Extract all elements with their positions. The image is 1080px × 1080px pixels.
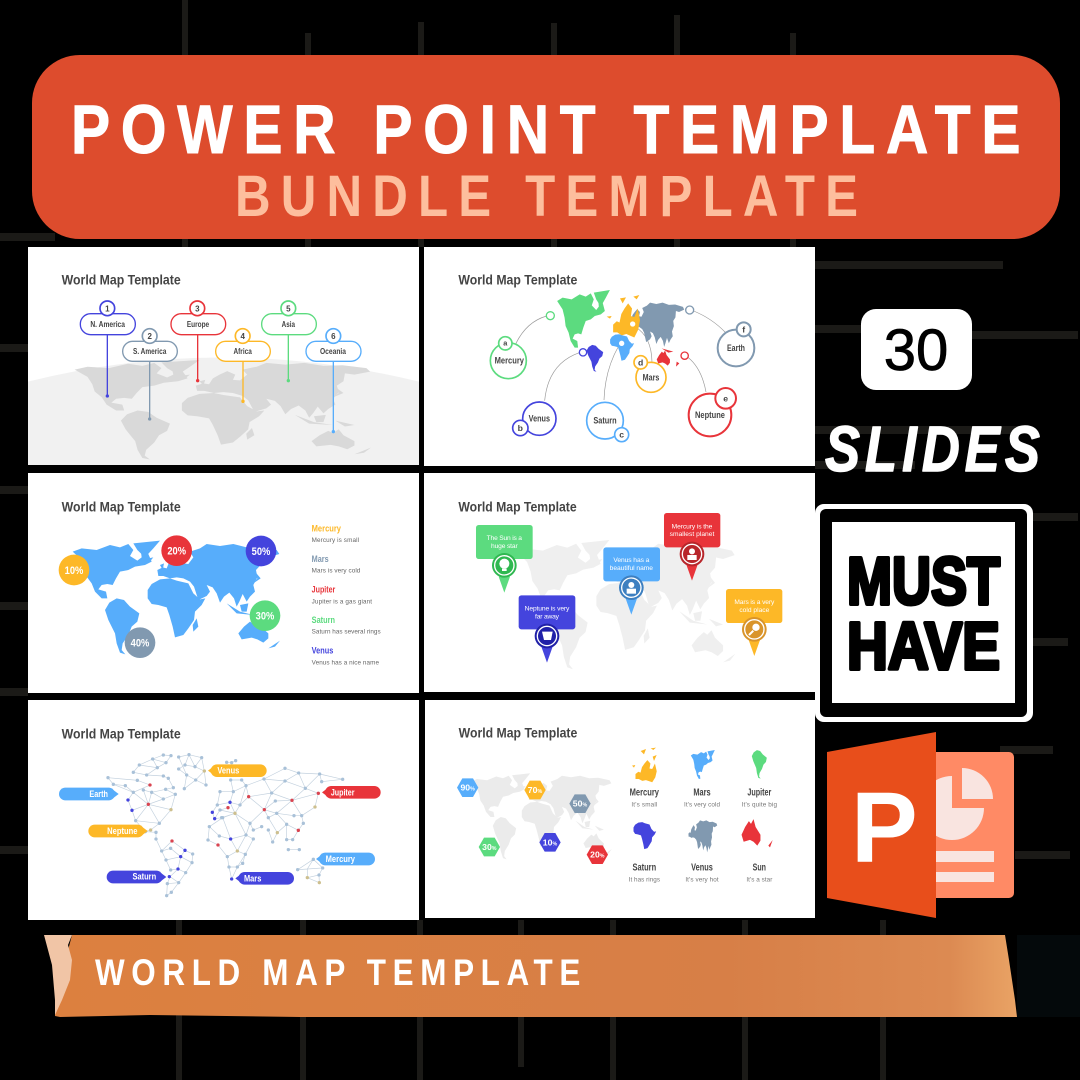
item: Jupiter [742, 750, 777, 809]
item: Saturn [629, 822, 660, 883]
slide 5: network map [28, 700, 419, 920]
item: Jupiter: It's quite big [742, 802, 777, 809]
callout: Africa [216, 329, 270, 403]
item: Venus: It's very hot [685, 876, 719, 883]
planet: Venus: Venus [529, 414, 550, 424]
callout: N. America: N. America [90, 319, 125, 329]
pin: Venus: beautiful name [610, 565, 653, 572]
label: Earth [59, 788, 119, 800]
pin: Mars: cold place [739, 607, 770, 614]
connectors [516, 311, 725, 401]
legend: Mars is very cold [312, 568, 361, 575]
blue map [73, 541, 280, 654]
item: Mars: Mars [693, 788, 711, 799]
item: Saturn: It has rings [629, 876, 660, 883]
item: Mars [684, 750, 720, 809]
badge: MUST HAVE: HAVE [847, 609, 1000, 684]
icon: PowerPoint: P [851, 772, 918, 884]
subtitle: BUNDLE TEMPLATE [235, 164, 858, 229]
bottom ribbon [44, 935, 1017, 1017]
callout: Asia: 5 [286, 304, 291, 313]
legend: Jupiter [312, 584, 336, 594]
hexagon markers: 30% [482, 842, 497, 852]
callout: Oceania [306, 329, 361, 433]
legend: Saturn [312, 615, 335, 625]
pin: Neptune [519, 595, 575, 663]
legend: Mercury [312, 523, 342, 533]
planet: Venus [513, 402, 556, 436]
item: Saturn: Saturn [632, 862, 656, 873]
pin: Neptune: far away [535, 614, 560, 621]
hexagon markers [457, 778, 608, 864]
percentage markers: 30% [256, 611, 275, 623]
slide title: World Map Template [62, 726, 181, 742]
planet: Saturn: Saturn [593, 416, 617, 426]
label: Venus: Venus [217, 766, 239, 776]
planet: Earth: f [742, 324, 745, 334]
hexagon markers: 10% [543, 837, 557, 847]
planet: Mars [634, 356, 666, 392]
anchor dots [546, 306, 694, 359]
item: Venus: Venus [691, 862, 713, 873]
main title: POWER POINT TEMPLATE [71, 91, 1020, 168]
pin: Mars [726, 589, 782, 656]
gray map [75, 360, 371, 459]
label: Mercury: Mercury [326, 854, 356, 864]
planet: Earth [718, 322, 754, 366]
planet: Saturn: c [619, 429, 624, 439]
item: Mercury: Mercury [630, 788, 659, 799]
pin: Mercury: smallest planet [670, 531, 714, 538]
legend: Venus has a nice name [312, 659, 379, 666]
pin: Venus [603, 547, 660, 615]
callout: Europe [171, 301, 226, 382]
legend [312, 523, 381, 666]
planet: Neptune [689, 388, 736, 436]
label: Saturn [107, 871, 166, 883]
slide title: World Map Template [62, 271, 181, 287]
badge: 30: 30 [884, 318, 948, 383]
hexagon markers: 70% [528, 785, 542, 795]
label: Jupiter [322, 786, 381, 799]
percentage markers: 40% [131, 638, 150, 650]
item: Mars: It's very cold [684, 802, 720, 809]
slide 6: hexagons and continents [425, 700, 815, 918]
pin: Sun: The Sun is a [487, 535, 522, 542]
pin: Mercury [664, 513, 720, 581]
item: Mercury [630, 748, 659, 809]
callout: Europe: 3 [195, 304, 200, 313]
label: Saturn: Saturn [132, 872, 156, 882]
percentage markers [59, 535, 280, 658]
percentage markers: 10% [65, 565, 84, 577]
callout: S. America: 2 [147, 332, 152, 341]
callout: Europe: Europe [187, 319, 209, 329]
globe [28, 357, 419, 465]
legend: Saturn has several rings [312, 629, 381, 636]
item: Jupiter: Jupiter [747, 788, 772, 799]
slide title: World Map Template [62, 499, 181, 515]
badge: MUST HAVE: MUST [847, 544, 1000, 619]
label: Neptune: Neptune [107, 826, 137, 836]
label: Mars [235, 872, 294, 885]
pale map [518, 540, 735, 669]
planet: Neptune: e [723, 393, 728, 403]
planet: Mercury [490, 337, 526, 379]
slide 1: world map callouts [28, 247, 419, 465]
slide title: World Map Template [458, 499, 577, 515]
label: Venus [208, 764, 267, 777]
label: Jupiter: Jupiter [331, 788, 355, 798]
label: Mercury [316, 853, 375, 865]
heading: SLIDES: SLIDES [825, 414, 1040, 485]
callout: N. America: 1 [105, 304, 110, 313]
label: Earth: Earth [89, 789, 108, 799]
icon: PowerPoint [827, 732, 1014, 918]
badge: MUST HAVE [815, 504, 1033, 722]
planet: Mercury: a [503, 339, 508, 348]
legend: Jupiter is a gas giant [312, 598, 372, 605]
item: Venus [685, 820, 719, 883]
label: Mars: Mars [244, 874, 261, 884]
hexagon markers: 90% [460, 783, 475, 793]
pin: Sun: huge star [491, 543, 518, 550]
callout: Oceania: Oceania [320, 346, 346, 356]
slide title: World Map Template [459, 725, 578, 741]
callout: N. America [80, 301, 135, 398]
pin: Mars: Mars is a very [734, 599, 775, 606]
item: Sun: It's a star [746, 876, 772, 883]
planet: Mars: d [638, 357, 643, 367]
planet: Saturn [587, 402, 629, 442]
legend: Mercury is small [312, 537, 359, 544]
callout: S. America: S. America [133, 346, 167, 356]
badge: 30 [861, 309, 972, 390]
slide 4: map with pins [424, 473, 815, 692]
slide title: World Map Template [458, 271, 578, 287]
mesh nodes [108, 755, 343, 896]
planet: Venus: b [518, 423, 523, 433]
slide 2: colored continents with planets [424, 247, 815, 466]
legend: Mars [312, 554, 329, 564]
hexagon markers: 50% [573, 799, 587, 809]
callout: Asia [262, 301, 316, 382]
percentage markers: 50% [252, 546, 271, 558]
continents [557, 290, 684, 372]
item: Sun: Sun [753, 862, 766, 873]
label: Neptune [88, 825, 148, 837]
item: Mercury: It's small [631, 802, 657, 809]
planet: Earth: Earth [727, 343, 745, 353]
mesh lines [108, 755, 343, 896]
pale map [471, 773, 612, 859]
hexagon markers: 20% [590, 850, 605, 860]
callout: Oceania: 6 [331, 332, 336, 341]
pin: Neptune: Neptune is very [525, 606, 570, 613]
percentage markers: 20% [167, 546, 186, 558]
callout: Africa: Africa [233, 346, 252, 356]
legend: Venus [312, 645, 333, 655]
planet: Mars: Mars [643, 372, 659, 382]
pin: Mercury: Mercury is the [672, 523, 713, 530]
slide 3: blue map with percentages [28, 473, 419, 693]
callout: Africa: 4 [240, 332, 245, 341]
pin: Venus: Venus has a [613, 557, 650, 564]
callout: S. America [123, 329, 177, 421]
top title banner [32, 55, 1060, 239]
item: Sun [742, 819, 773, 883]
planet: Mercury: Mercury [495, 356, 524, 366]
callout: Asia: Asia [282, 319, 295, 329]
pin: Sun [476, 525, 533, 593]
ribbon text: WORLD MAP TEMPLATE [95, 953, 580, 994]
planet: Neptune: Neptune [695, 410, 725, 420]
